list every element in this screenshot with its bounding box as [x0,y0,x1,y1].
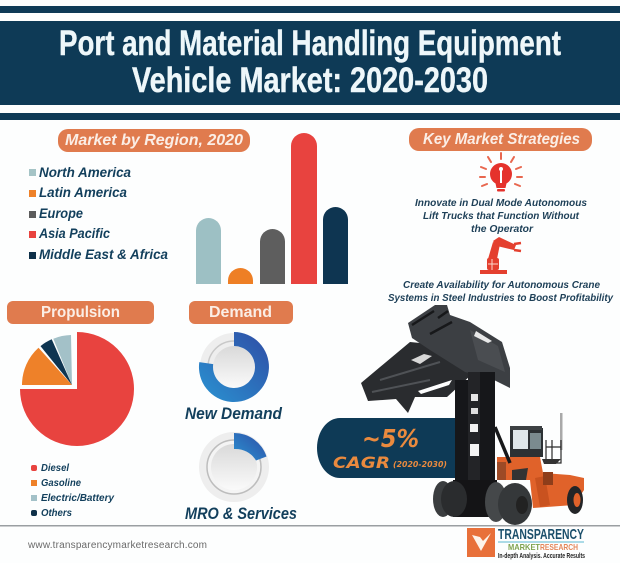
propulsion legend: Others [41,507,72,519]
donut chart: new demand [199,332,269,402]
truck cab [510,413,562,464]
region legend: Middle East & Africa [39,246,168,262]
logo: transparency market research: RESEARCH [540,542,578,552]
heading: demand: Demand [209,304,272,321]
truck wheels [433,481,583,525]
logo mark [467,528,495,557]
footer rule [0,525,620,526]
truck spreader arm [361,305,510,413]
label: new demand: New Demand [185,404,283,423]
icon: light bulb [480,153,522,192]
propulsion legend: Diesel [41,462,70,474]
logo: transparency market research: In-depth Analysis. Accurate Results [498,553,585,560]
region legend: Asia Pacific [38,225,110,241]
region legend: North America [39,164,131,180]
logo: transparency market research [467,526,585,560]
truck body [495,427,584,508]
CAGR callout: (2020-2030) [393,460,447,469]
pie chart: propulsion [20,332,134,446]
propulsion legend: Electric/Battery [41,492,115,504]
CAGR callout [317,418,457,478]
bar chart: market by region [196,133,348,284]
region legend [29,164,168,262]
strategy text 2 [388,280,613,304]
strategy text 1 [415,198,587,235]
heading: market by region [58,129,250,152]
CAGR callout: ~5% [362,424,419,453]
heading: propulsion [7,301,154,324]
heading: market by region: Market by Region, 2020 [65,132,243,149]
label: MRO and services: MRO & Services [185,504,297,523]
panel: demand [185,301,297,523]
CAGR callout: CAGR [333,453,390,472]
truck mast [453,372,497,517]
donut chart: MRO and services [199,432,269,502]
title: Vehicle Market: 2020-2030 [132,61,488,100]
strategy text 2: Systems in Steel Industries to Boost Profitability [388,293,613,304]
heading: propulsion: Propulsion [41,304,120,321]
logo: transparency market research: TRANSPARENCY [498,526,584,543]
heading: key market strategies: Key Market Strategies [423,131,580,148]
title [59,24,561,100]
strategy text 2: Create Availability for Autonomous Crane [403,280,600,291]
panel: key market strategies [388,128,613,304]
propulsion legend: Gasoline [41,477,81,489]
strategy text 1: the Operator [471,224,534,235]
panel: propulsion [7,301,154,519]
icon: robot arm [480,237,521,274]
illustration: container handler truck [361,305,584,525]
strategy text 1: Lift Trucks that Function Without [423,211,580,222]
strategy text 1: Innovate in Dual Mode Autonomous [415,198,587,209]
panel: market by region [29,129,348,284]
header banner [0,6,620,120]
heading: demand [189,301,293,324]
region legend: Europe [39,205,83,221]
website url: www.transparencymarketresearch.com [27,540,207,551]
propulsion legend [31,462,115,519]
logo: transparency market research: MARKET [508,542,541,552]
heading: key market strategies [409,128,592,151]
region legend: Latin America [39,184,127,200]
